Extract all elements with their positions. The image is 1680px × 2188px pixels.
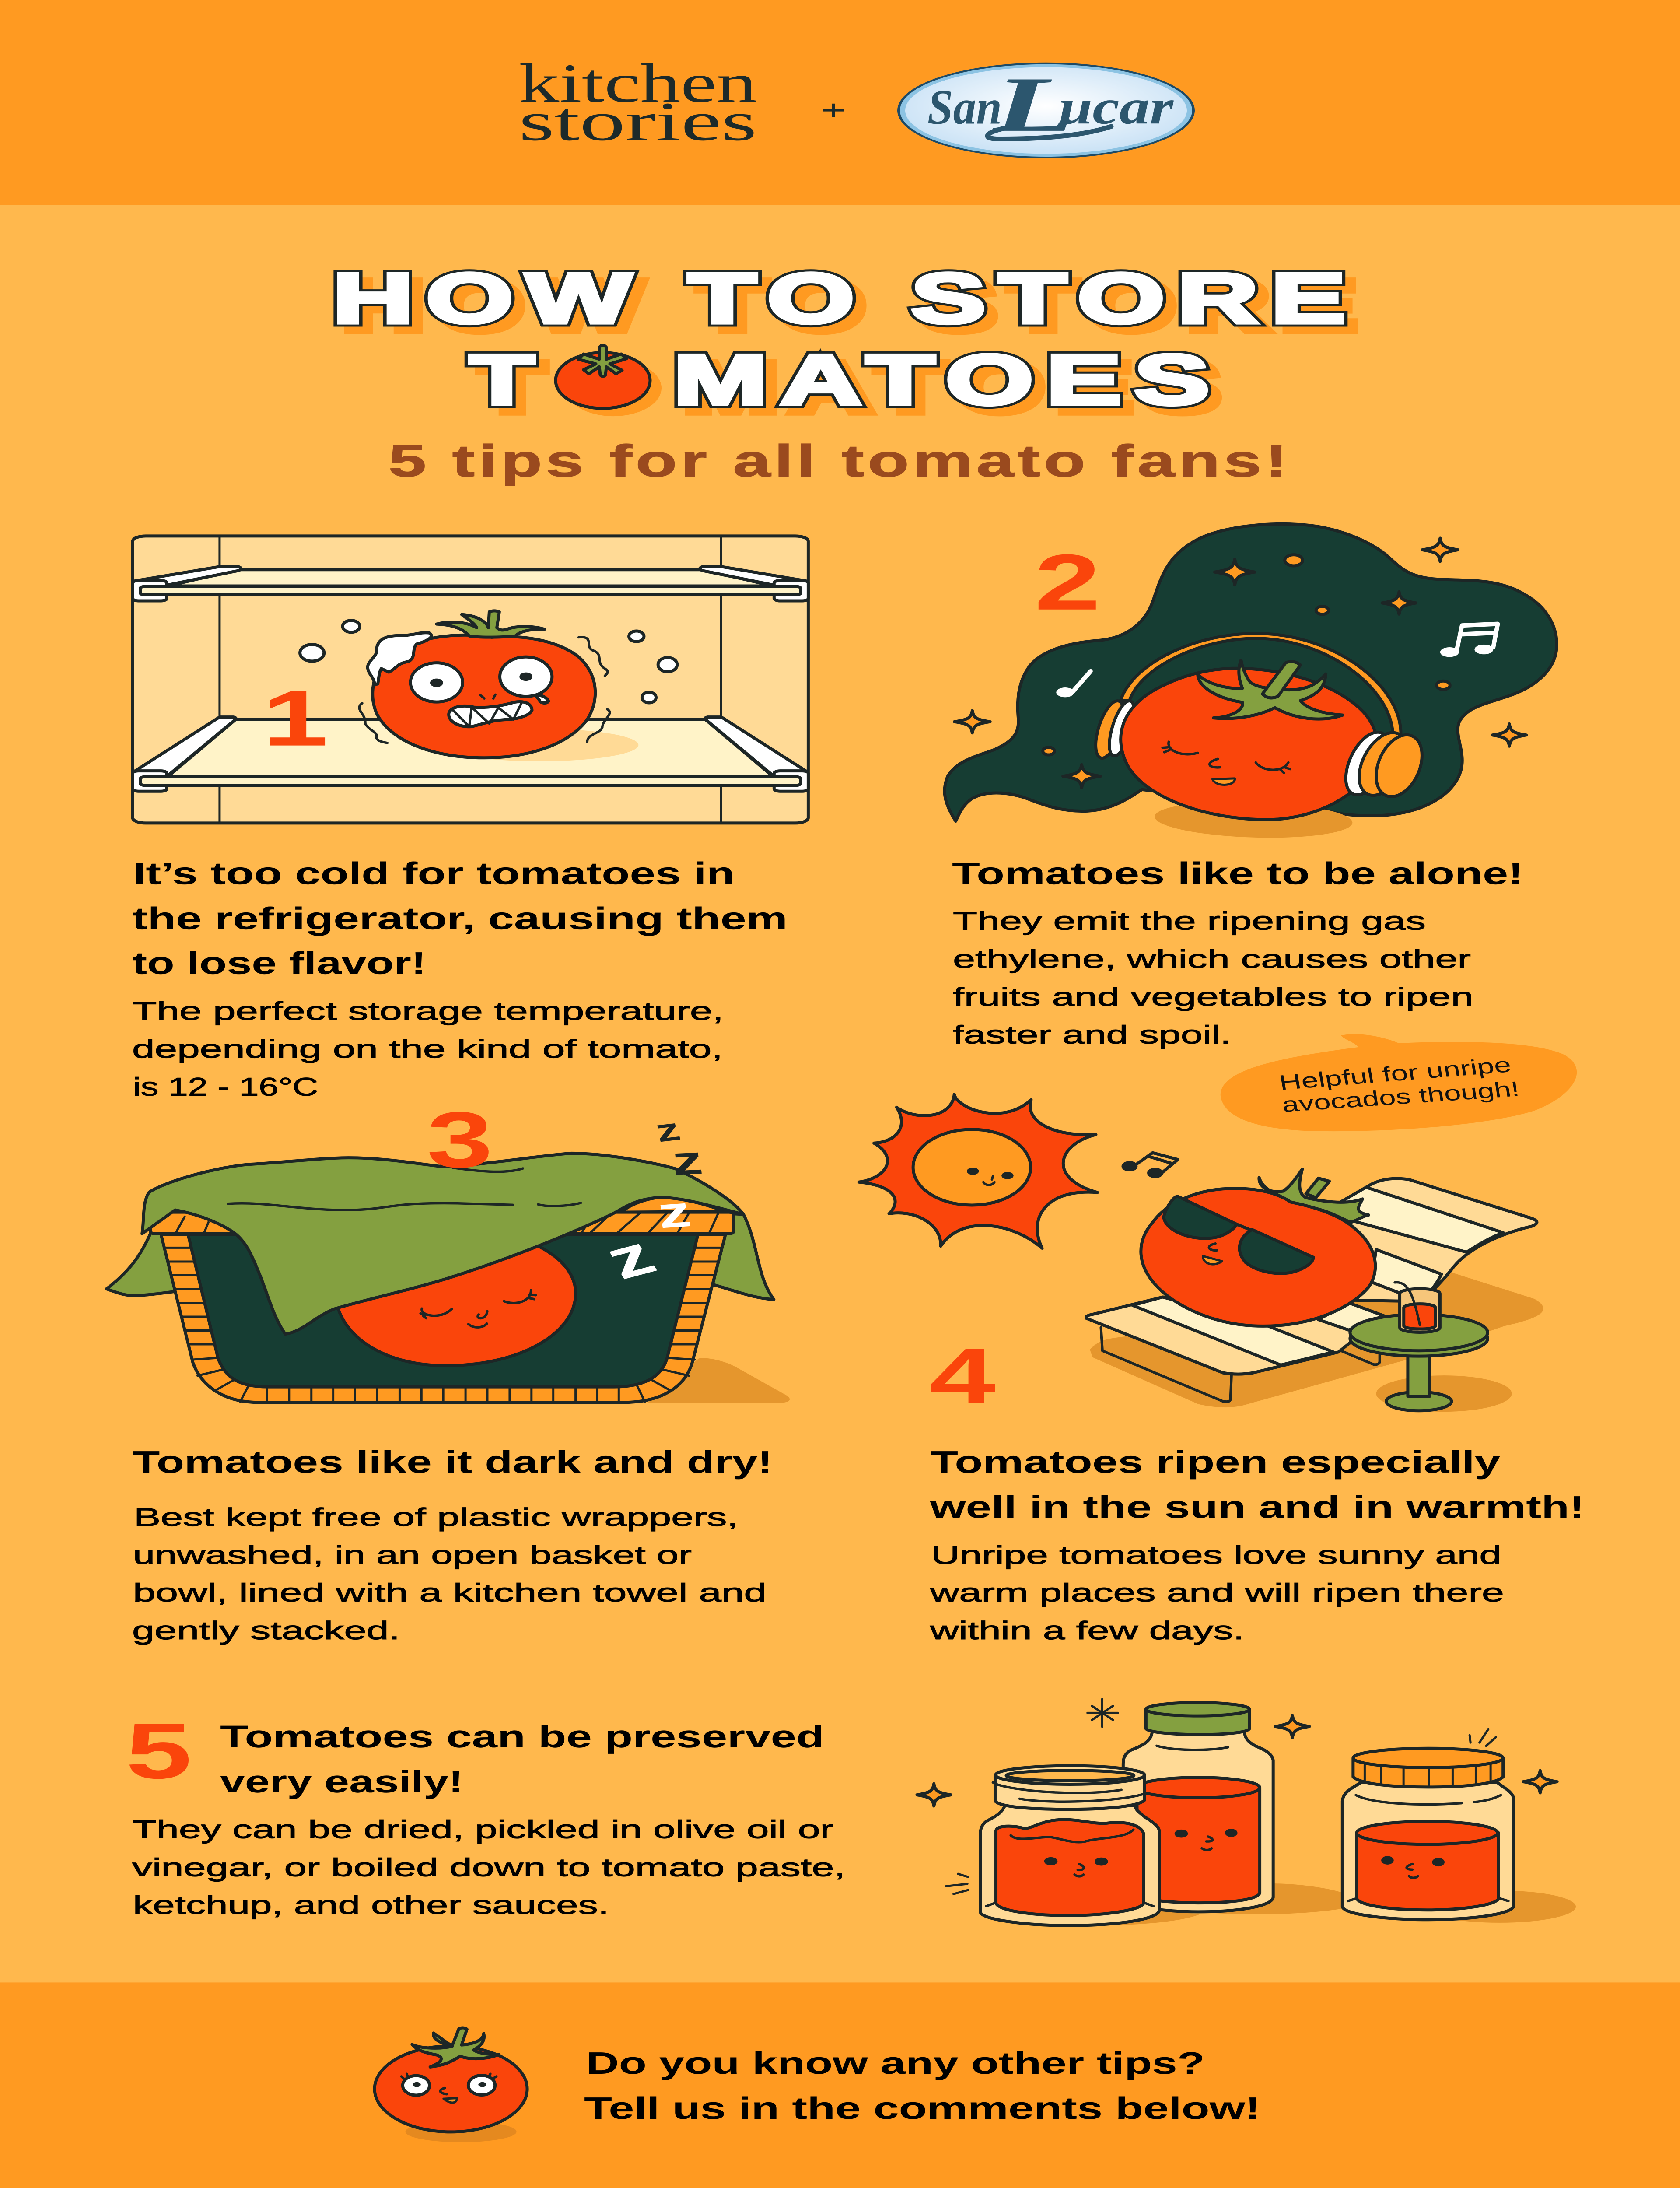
- sleeping face: [420, 1290, 536, 1327]
- header band with logos: [0, 0, 1680, 205]
- title outline: MATOES: [673, 340, 1222, 419]
- callout text: [1277, 1053, 1521, 1117]
- logo: kitchen stories: stories: [519, 91, 757, 152]
- title: [332, 259, 1369, 427]
- logo: SanLucar: L: [991, 61, 1076, 148]
- logo: kitchen stories: kitchen: [519, 53, 757, 114]
- tip 2 body: ethylene, which causes other: [953, 945, 1471, 973]
- tip 2 body: [953, 907, 1474, 1049]
- tip 4 heading: [930, 1444, 1585, 1525]
- tip 5 body: vinegar, or boiled down to tomato paste,: [132, 1853, 845, 1882]
- side table: [1350, 1315, 1488, 1411]
- tip 5 body: ketchup, and other sauces.: [133, 1891, 609, 1919]
- green towel: [142, 1153, 743, 1334]
- basket rim: [150, 1197, 734, 1234]
- tip 4 text: [930, 1444, 1585, 1645]
- smile: [1212, 778, 1235, 785]
- subtitle: 5 tips for all tomato fans!: [388, 436, 1288, 486]
- white music notes: [1056, 624, 1498, 697]
- sunglasses: [1164, 1196, 1313, 1273]
- snore letters: [593, 1111, 705, 1291]
- title fill: HOW TO STORE: [332, 259, 1358, 338]
- tomato stem and leaves: [1259, 1169, 1368, 1222]
- towel back flaps: [106, 1213, 774, 1300]
- tip 1 body: The perfect storage temperature,: [132, 996, 724, 1025]
- lounger shadow: [1090, 1272, 1544, 1407]
- nose: [480, 694, 495, 698]
- fridge box: [133, 536, 808, 823]
- right jar: [1342, 1748, 1514, 1920]
- basket shadow: [647, 1358, 790, 1403]
- drink glass: [1395, 1282, 1440, 1332]
- tip 3 body: unwashed, in an open basket or: [133, 1540, 692, 1569]
- footer band: [0, 1982, 1680, 2188]
- tip 3 body: Best kept free of plastic wrappers,: [134, 1503, 738, 1532]
- title fill: T: [469, 340, 546, 419]
- footer tomato mascot: [374, 2028, 527, 2142]
- basket interior: [188, 1234, 698, 1387]
- title shadow: HOW TO STORE: [343, 266, 1369, 345]
- number 4: 4: [929, 1332, 996, 1420]
- left ear cup: [1090, 700, 1139, 759]
- upper shelf: [133, 567, 808, 601]
- lower shelf: [133, 717, 808, 791]
- callout text: avocados though!: [1280, 1077, 1521, 1117]
- snore letters: z: [670, 1138, 705, 1184]
- tip 5 body: [132, 1815, 845, 1919]
- tip 5 heading: [220, 1719, 824, 1799]
- title outline: [332, 259, 1358, 419]
- orange dots: [1043, 555, 1450, 755]
- tip 5 heading: very easily!: [220, 1764, 463, 1799]
- tomato leaves: [437, 611, 545, 637]
- tip 1 body: is 12 - 16°C: [133, 1072, 318, 1101]
- sparkle stars: [955, 538, 1526, 788]
- plus sign: +: [821, 95, 846, 126]
- snore letters: z: [654, 1187, 694, 1238]
- stem: [1263, 662, 1300, 698]
- sun: [859, 1094, 1097, 1248]
- tip 3 body: gently stacked.: [132, 1616, 400, 1645]
- tip 3 body: bowl, lined with a kitchen towel and: [133, 1578, 766, 1607]
- logo: SanLucar: San: [928, 80, 1002, 134]
- right ear cup: [1338, 731, 1429, 798]
- footer text: Tell us in the comments below!: [584, 2090, 1260, 2125]
- sparkles and ticks: [917, 1699, 1557, 1894]
- tomato body: [1121, 668, 1377, 820]
- title shadow: MATOES: [684, 348, 1233, 427]
- tip 3 heading: Tomatoes like it dark and dry!: [132, 1444, 773, 1480]
- tip 5 text: [132, 1719, 845, 1919]
- tip 5 heading: Tomatoes can be preserved: [220, 1719, 824, 1754]
- middle bottle: [1123, 1703, 1273, 1912]
- ground shadow: [1152, 799, 1355, 841]
- number 2: 2: [1034, 538, 1101, 626]
- title fill: MATOES: [673, 340, 1222, 419]
- tip 2 heading: Tomatoes like to be alone!: [952, 856, 1523, 891]
- tip 1 heading: the refrigerator, causing them: [132, 901, 788, 936]
- sleeping face: [1162, 742, 1290, 773]
- speech bubble callout: [1221, 1034, 1577, 1131]
- logo: SanLucar: [897, 61, 1195, 158]
- tip 1 text: [132, 856, 788, 1101]
- tip 4 body: [930, 1540, 1504, 1645]
- snow cap: [368, 633, 431, 685]
- illustration 3: sleeping tomato in basket: [106, 1153, 790, 1403]
- snore letters: z: [651, 1111, 684, 1149]
- illustration 1: tomato in refrigerator: [133, 536, 808, 823]
- tip 1 heading: [132, 856, 788, 981]
- tip 4 heading: well in the sun and in warmth!: [930, 1489, 1585, 1525]
- tip 5 body: They can be dried, pickled in olive oil or: [132, 1815, 833, 1844]
- icon: title tomato: [556, 345, 650, 408]
- tomato body: [373, 635, 595, 758]
- lounger seat: [1086, 1297, 1384, 1374]
- tomato leaves: [1198, 660, 1343, 719]
- tip 1 body: [132, 996, 724, 1101]
- basket body: [161, 1234, 725, 1403]
- dark blob background: [945, 524, 1557, 821]
- tip 4 body: Unripe tomatoes love sunny and: [931, 1540, 1502, 1569]
- tip 2 text: [952, 856, 1523, 1049]
- number 1: 1: [262, 674, 329, 762]
- tip 4 heading: Tomatoes ripen especially: [930, 1444, 1500, 1480]
- title outline: T: [469, 340, 546, 419]
- number 5: 5: [126, 1707, 192, 1795]
- tip 2 body: fruits and vegetables to ripen: [953, 982, 1474, 1011]
- left jar: [980, 1766, 1159, 1925]
- tip 3 body: [132, 1503, 766, 1645]
- logo: kitchen stories: [519, 53, 757, 152]
- lounger back: [1334, 1178, 1537, 1301]
- gritted teeth: [449, 702, 532, 727]
- footer text: Do you know any other tips?: [586, 2046, 1205, 2080]
- table shadow: [1376, 1375, 1512, 1412]
- towel wrinkles: [228, 1168, 581, 1210]
- illustration 4: sunbathing tomato: [859, 1094, 1544, 1412]
- footer text: [584, 2046, 1260, 2125]
- illustration 2: tomato with headphones: [945, 524, 1557, 841]
- tip 4 body: within a few days.: [930, 1616, 1244, 1645]
- tip 1 heading: It’s too cold for tomatoes in: [133, 856, 735, 891]
- snore letters: z: [593, 1224, 667, 1291]
- lounger legs: [1101, 1327, 1380, 1402]
- scared eyes: [410, 657, 552, 703]
- title fill: [332, 259, 1358, 419]
- tip 3 text: [132, 1444, 773, 1645]
- number 3: 3: [427, 1095, 493, 1184]
- tip 2 body: faster and spoil.: [953, 1020, 1231, 1049]
- tomato body: [1141, 1189, 1376, 1326]
- illustration 5: preserve jars: [917, 1699, 1576, 1925]
- sleeping tomato: [337, 1245, 576, 1366]
- tip 1 heading: to lose flavor!: [132, 946, 426, 981]
- tip 2 body: They emit the ripening gas: [953, 907, 1426, 935]
- title outline: HOW TO STORE: [332, 259, 1358, 338]
- tip 4 body: warm places and will ripen there: [930, 1578, 1504, 1607]
- cold dots: [300, 621, 677, 703]
- basket weave: [165, 1248, 722, 1403]
- tip 1 body: depending on the kind of tomato,: [132, 1034, 723, 1063]
- logo: SanLucar: ucar: [1059, 80, 1174, 134]
- shiver lines: [359, 637, 610, 743]
- title shadow: T: [480, 348, 557, 427]
- music note: [1123, 1153, 1178, 1177]
- headphone band: [1120, 634, 1401, 735]
- title shadow: [343, 266, 1369, 427]
- jar shadows: [1098, 1883, 1576, 1925]
- nose and mouth: [1203, 1244, 1222, 1264]
- callout text: Helpful for unripe: [1277, 1053, 1513, 1094]
